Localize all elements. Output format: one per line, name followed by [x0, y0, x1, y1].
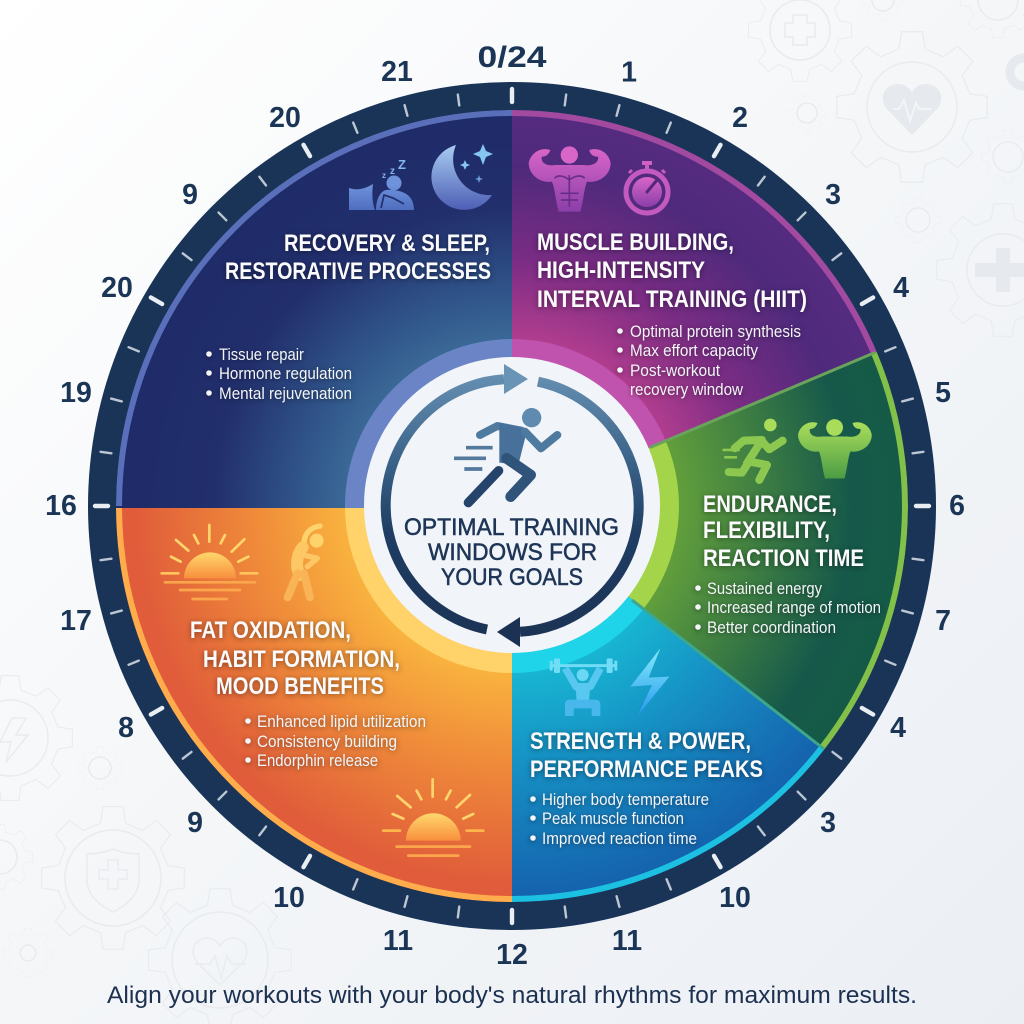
bullet list: muscle building: Max effort capacity: [630, 341, 758, 360]
dial inner edge: [114, 108, 910, 904]
rim purple: [512, 113, 874, 353]
title: WINDOWS FOR: [428, 539, 597, 566]
bullet list: muscle building: Optimal protein synthesis: [630, 322, 801, 341]
bullet list: fat oxidation: Endorphin release: [257, 751, 378, 770]
heading: endurance: FLEXIBILITY,: [703, 517, 830, 544]
bullet list: recovery and sleep: Hormone regulation: [219, 364, 352, 383]
bullet list: strength: Peak muscle function: [542, 809, 684, 828]
bullet list: recovery and sleep: [206, 345, 352, 403]
divider green to blue: [632, 600, 824, 749]
icon: setting sun: [383, 779, 483, 856]
heading: fat oxidation: HABIT FORMATION,: [203, 646, 400, 673]
icon: green muscular torso: [798, 419, 872, 478]
icon: stretching figure: [288, 526, 324, 597]
hour labels around the dial: 3: [820, 807, 836, 839]
bullet list: endurance: Better coordination: [707, 618, 836, 637]
panel: strength and power: [512, 506, 826, 904]
title: OPTIMAL TRAINING: [404, 514, 619, 541]
bullet list: strength: Higher body temperature: [542, 790, 709, 809]
hour labels around the dial: 10: [719, 882, 751, 914]
hour labels around the dial: 11: [612, 925, 642, 957]
bullet list: strength: Improved reaction time: [542, 829, 697, 848]
rim green: [822, 353, 905, 747]
hour tick marks: [95, 89, 929, 923]
heading: muscle building and HIIT: INTERVAL TRAINING (HIIT): [537, 286, 807, 313]
icon: crescent moon and stars: [431, 144, 493, 210]
segment wedge orange: [114, 508, 512, 904]
inner band green: [512, 441, 679, 609]
bullet list: muscle building: Post-workout: [630, 361, 720, 380]
icon: stopwatch: [626, 161, 668, 213]
inner band navy: [345, 339, 512, 508]
segment wedge navy: [114, 108, 512, 508]
bullet list: fat oxidation: [245, 712, 426, 770]
divider purple to green: [650, 352, 875, 448]
heading: endurance: REACTION TIME: [703, 545, 864, 572]
segment wedge blue: [512, 506, 826, 904]
hour labels around the dial: 4: [890, 712, 906, 744]
inner band purple: [512, 339, 666, 506]
panel: fat oxidation and mood: [114, 508, 512, 904]
center hub: [364, 357, 660, 653]
bullet list: muscle building: [617, 322, 801, 399]
icon: sleeping person: [349, 157, 414, 210]
hour labels around the dial: 16: [45, 490, 77, 522]
hour labels around the dial: 11: [383, 925, 413, 957]
clock dial ring: [88, 82, 936, 930]
icon: muscular torso: [529, 146, 611, 212]
hub disc: [364, 357, 660, 653]
heading: strength and power: PERFORMANCE PEAKS: [530, 756, 763, 783]
bullet list: endurance: [695, 579, 881, 637]
hour labels around the dial: 1: [621, 56, 637, 88]
heading: fat oxidation: FAT OXIDATION,: [190, 617, 351, 644]
icon: running figure: [454, 408, 557, 503]
title: YOUR GOALS: [441, 564, 583, 591]
hour labels around the dial: 20: [269, 102, 301, 134]
rim orange: [119, 508, 512, 899]
title: [404, 514, 619, 591]
icon: sleeping person: Z: [398, 157, 406, 172]
bullet list: recovery and sleep: Mental rejuvenation: [219, 384, 352, 403]
heading: muscle building and HIIT: [537, 229, 807, 313]
heading: fat oxidation: [190, 617, 400, 700]
heading: muscle building and HIIT: MUSCLE BUILDING,: [537, 229, 734, 256]
icon: sleeping person: z: [390, 166, 395, 177]
hour labels around the dial: 8: [118, 712, 134, 744]
bullet list: muscle building: recovery window: [630, 380, 744, 399]
heading: endurance: ENDURANCE,: [703, 491, 837, 518]
hour labels around the dial: 9: [182, 179, 198, 211]
bullet list: endurance: Sustained energy: [707, 579, 822, 598]
hour labels around the dial: 20: [101, 272, 133, 304]
heading: endurance: [703, 491, 864, 572]
panel: recovery and sleep: [114, 108, 512, 508]
hour labels around the dial: 17: [60, 605, 92, 637]
hour labels around the dial: 2: [732, 102, 748, 134]
bullet list: strength: [530, 790, 709, 848]
heading: recovery and sleep: [225, 230, 491, 285]
segment wedge purple: [512, 108, 879, 506]
circular arrows: [386, 364, 639, 647]
bullet list: fat oxidation: Enhanced lipid utilization: [257, 712, 426, 731]
hour labels around the dial: 4: [893, 272, 909, 304]
hour labels around the dial: 9: [187, 807, 203, 839]
hour labels around the dial: 3: [825, 179, 841, 211]
footer caption: Align your workouts with your body's natural rhythms for maximum results.: [107, 982, 917, 1009]
inner band orange: [345, 508, 512, 673]
segment wedge green: [512, 351, 910, 750]
rim navy: [119, 113, 512, 506]
hour labels around the dial: 21: [381, 56, 413, 88]
decorative gears with health icons: bottom left: [0, 676, 291, 1024]
hour labels around the dial: 12: [496, 939, 528, 971]
bullet list: recovery and sleep: Tissue repair: [219, 345, 304, 364]
panel: muscle building and HIIT: [512, 108, 879, 506]
heading: strength and power: [530, 728, 763, 783]
hour labels around the dial: 6: [949, 490, 965, 522]
heading: recovery and sleep: RECOVERY & SLEEP,: [284, 230, 490, 257]
icon: green runner: [724, 419, 783, 480]
bullet list: endurance: Increased range of motion: [707, 598, 881, 617]
icon: sleeping person: z: [382, 171, 386, 180]
icon: rising sun: [162, 525, 257, 599]
icon: weightlifter: [550, 658, 617, 716]
heading: muscle building and HIIT: HIGH-INTENSITY: [537, 257, 705, 284]
hour labels around the dial: 0/24: [478, 41, 547, 74]
hour labels around the dial: 7: [935, 605, 951, 637]
hour labels around the dial: 19: [60, 377, 92, 409]
rim blue: [512, 747, 822, 899]
inner band blue: [512, 506, 644, 673]
heading: fat oxidation: MOOD BENEFITS: [216, 673, 384, 700]
heading: recovery and sleep: RESTORATIVE PROCESSES: [225, 258, 491, 285]
bullet list: fat oxidation: Consistency building: [257, 732, 397, 751]
hour labels around the dial: 5: [935, 377, 951, 409]
icon: lightning bolt: [630, 648, 669, 715]
panel: endurance and flexibility: [512, 351, 910, 750]
decorative gears with health icons: top right: [749, 0, 1024, 336]
heading: strength and power: STRENGTH & POWER,: [530, 728, 751, 755]
hour labels around the dial: 10: [273, 882, 305, 914]
